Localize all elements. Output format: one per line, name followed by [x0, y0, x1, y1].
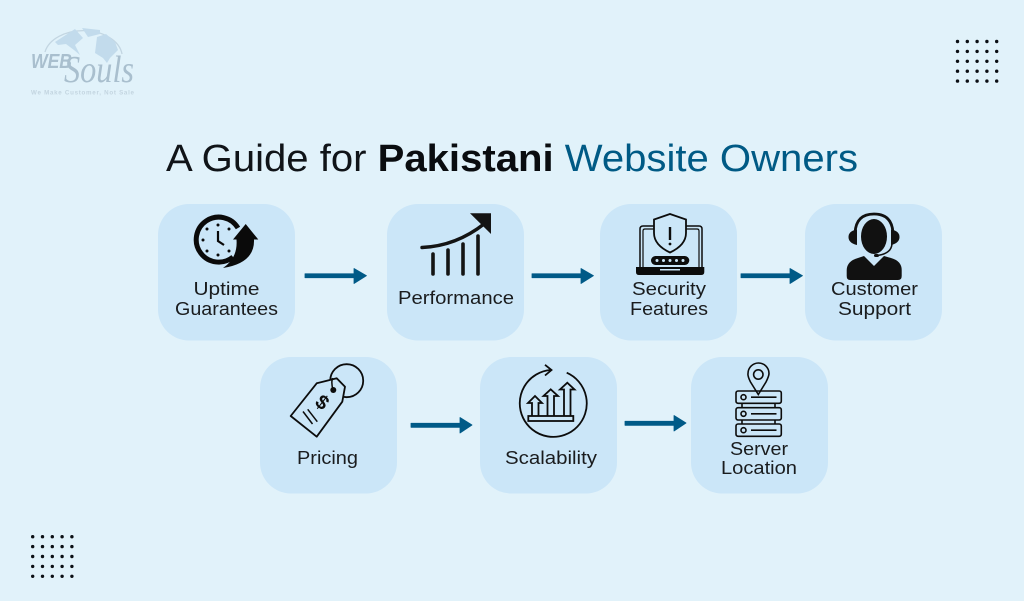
logo: Web Souls — [31, 28, 135, 96]
panel: Uptime Guarantees — [158, 204, 295, 340]
label: Scalability — [505, 448, 597, 468]
label: Security — [632, 279, 706, 299]
panel: Scalability — [480, 357, 617, 494]
panel: Pricing — [260, 357, 397, 494]
icon: support agent — [847, 214, 902, 280]
icon: server with pin — [736, 363, 781, 436]
arrow — [625, 416, 686, 431]
icon: clock with arrow — [196, 217, 258, 268]
label: Guarantees — [175, 299, 278, 319]
label: Location — [721, 458, 797, 478]
label: Features — [630, 299, 708, 319]
arrow — [411, 418, 472, 433]
icon detail: dollar sign: $ — [311, 391, 333, 415]
icon: scaling arrows in circle — [520, 365, 587, 437]
arrow — [532, 268, 594, 284]
panel: Server Location — [691, 357, 828, 494]
icon: laptop with shield — [636, 214, 704, 275]
decorative dot grid: top right — [956, 40, 998, 83]
label: Customer — [831, 279, 918, 299]
decorative dot grid: bottom left — [31, 535, 74, 578]
label: Support — [838, 299, 911, 319]
arrow — [305, 268, 366, 284]
arrow — [741, 268, 802, 284]
panel: Security Features — [600, 204, 737, 340]
label: Pricing — [297, 448, 358, 468]
panel: Customer Support — [805, 204, 942, 340]
label: Uptime — [194, 279, 260, 299]
panel: Performance — [387, 204, 524, 340]
title: A Guide for Pakistani Website Owners — [166, 138, 858, 180]
label: Performance — [398, 288, 514, 308]
logo: Web Souls: Souls — [64, 49, 134, 91]
logo: Web Souls: We Make Customer, Not Sale — [31, 90, 135, 96]
label: Server — [730, 439, 788, 459]
icon: growth chart — [422, 213, 491, 274]
logo: Web Souls: WEB — [31, 50, 72, 73]
